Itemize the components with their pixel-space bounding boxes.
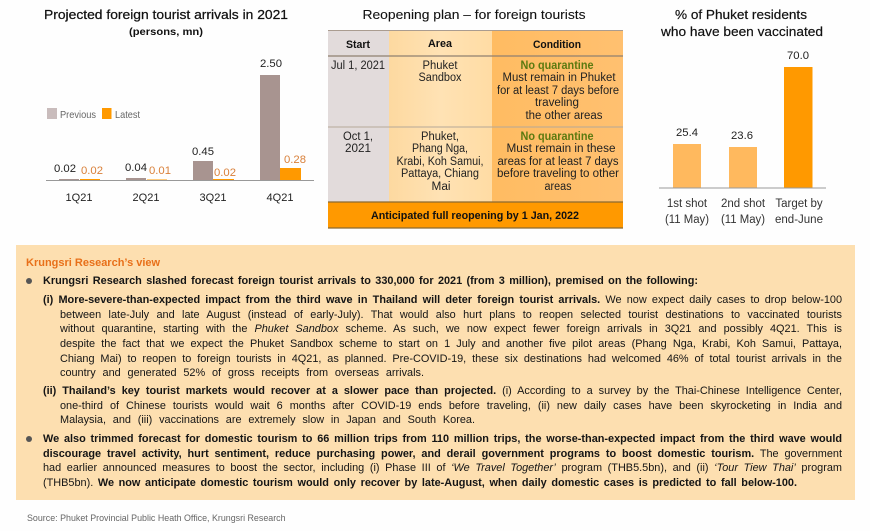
table footer: Anticipated full reopening by 1 Jan, 2022 xyxy=(371,210,579,222)
quarter labels: 4Q21 xyxy=(267,192,293,204)
value labels: 0.02 xyxy=(214,167,236,179)
row: Jul 1 2021: for at least 7 days before xyxy=(497,85,619,97)
row: Oct 1 2021: Must remain in these xyxy=(506,143,616,155)
row: Oct 1 2021: 2021 xyxy=(345,143,371,155)
row: Jul 1 2021: No quarantine xyxy=(520,60,594,72)
row: Oct 1 2021: Pattaya, Chiang xyxy=(401,168,479,180)
table title: Reopening plan – for foreign tourists xyxy=(362,7,586,22)
point (i): country and generated 52% of gross receipts from overseas arrivals. xyxy=(60,367,424,379)
category labels xyxy=(665,198,823,226)
chart title xyxy=(660,7,823,39)
row: Oct 1 2021 xyxy=(343,131,619,193)
point (ii) xyxy=(43,385,842,426)
chart title: who have been vaccinated xyxy=(660,24,823,39)
point (i): between late-July and late August (instead of early-July). That would also hurt plans to reopen selected tourist destinations to vaccinated tourists xyxy=(60,308,842,320)
row: Oct 1 2021: Mai xyxy=(432,181,450,193)
row: Oct 1 2021: Krabi, Koh Samui, xyxy=(396,156,484,168)
value labels: 0.04 xyxy=(125,162,147,174)
table header: Condition xyxy=(533,39,581,51)
bars xyxy=(59,75,301,180)
category labels: 2nd shot xyxy=(721,198,766,210)
row: Oct 1 2021: Phuket, xyxy=(421,131,459,143)
value labels: 23.6 xyxy=(731,130,753,142)
table cells xyxy=(328,30,623,228)
value labels: 0.45 xyxy=(192,146,214,158)
panel heading: Krungsri Research’s view xyxy=(26,257,160,269)
row: Oct 1 2021: before traveling to other xyxy=(497,168,619,180)
bullet 2 xyxy=(26,433,842,489)
chart title: % of Phuket residents xyxy=(675,7,808,22)
value labels: 25.4 xyxy=(676,127,698,139)
value labels: 2.50 xyxy=(260,58,282,70)
point (i): (i) More-severe-than-expected impact from the third wave in Thailand will deter foreign tourist arrivals. We now expect daily cases to drop below-100 xyxy=(43,294,842,306)
row: Jul 1 2021: Must remain in Phuket xyxy=(502,72,616,84)
category labels: (11 May) xyxy=(665,214,709,226)
point (i) xyxy=(43,294,842,379)
row: Jul 1 2021: Sandbox xyxy=(418,72,462,84)
quarter labels: 2Q21 xyxy=(133,192,159,204)
chart: Phuket residents vaccinated xyxy=(659,7,826,226)
axis xyxy=(659,187,826,189)
bullet 2: (THB5bn). We now anticipate domestic tourism would only recover by late-August, when daily domestic cases is predicted to fall below-100. xyxy=(43,477,797,489)
category labels: 1st shot xyxy=(667,198,708,210)
quarter labels xyxy=(66,192,293,204)
value labels xyxy=(54,58,306,179)
row: Jul 1 2021 xyxy=(331,60,619,122)
value labels: 0.02 xyxy=(54,163,76,175)
quarter labels: 3Q21 xyxy=(200,192,226,204)
legend: Latest xyxy=(115,109,140,121)
value labels: 0.28 xyxy=(284,154,306,166)
category labels: (11 May) xyxy=(721,214,765,226)
legend: Previous xyxy=(60,109,96,121)
row: Jul 1 2021: traveling xyxy=(535,97,579,109)
axis xyxy=(46,180,314,182)
value labels: 70.0 xyxy=(787,50,809,62)
row: Jul 1 2021: the other areas xyxy=(526,110,603,122)
row: Oct 1 2021: areas for at least 7 days xyxy=(498,156,619,168)
category labels: end-June xyxy=(775,214,823,226)
category labels: Target by xyxy=(775,198,823,210)
point (i): despite the fact that we expect the Phuket Sandbox scheme to start on 1 July and another five pilot areas (Phang Nga, Krabi, Koh Samui, Pattaya, xyxy=(60,338,842,350)
row: Oct 1 2021: areas xyxy=(544,181,572,193)
table: reopening plan xyxy=(328,7,623,229)
chart title: (persons, mn) xyxy=(129,26,203,38)
bullet 2: had earlier announced measures to boost the sector, including (i) Phase III of ‘We Travel Together’ program (THB5.5bn), and (ii) ‘Tour Tiew Thai’ program xyxy=(43,462,842,474)
bullet 2: discourage travel activity, hurt sentiment, reduce purchasing power, and derail government programs to boost domestic tourism. The government xyxy=(43,448,842,460)
chart: projected foreign tourist arrivals xyxy=(44,7,314,204)
bullet 1: Krungsri Research slashed forecast foreign tourist arrivals to 330,000 for 2021 (from 3 million), premised on the following: xyxy=(43,275,698,287)
row: Oct 1 2021: Oct 1, xyxy=(343,131,373,143)
quarter labels: 1Q21 xyxy=(66,192,92,204)
value labels: 0.01 xyxy=(149,165,171,177)
value labels: 0.02 xyxy=(81,165,103,177)
value labels xyxy=(676,50,809,142)
table header: Area xyxy=(428,38,453,50)
point (i): without quarantine, starting with the Phuket Sandbox scheme. As such, we now expect fewer foreign arrivals in 3Q21 and possibly 4Q21. This is xyxy=(60,323,842,335)
table header: Start xyxy=(346,39,370,51)
bars xyxy=(673,67,812,188)
chart title xyxy=(44,7,288,38)
bullet 2: We also trimmed forecast for domestic tourism to 66 million trips from 110 million trips, the worse-than-expected impact from the third wave would xyxy=(43,433,842,445)
panel: Krungsri Research's view xyxy=(16,245,855,500)
legend xyxy=(47,108,140,121)
row: Oct 1 2021: No quarantine xyxy=(520,131,594,143)
point (i): Chiang Mai) to reopen to foreign tourists in 4Q21, as planned. Pre-COVID-19, these six destinations had welcomed 46% of total tourist arrivals in the xyxy=(60,352,842,364)
chart title: Projected foreign tourist arrivals in 2021 xyxy=(44,7,288,22)
point (ii): one-third of Chinese tourists would wait 6 months after COVID-19 ends before traveling, (ii) new daily cases have been skyrocketing in India and xyxy=(60,400,842,412)
table header xyxy=(346,38,581,51)
source note: Source: Phuket Provincial Public Heath Office, Krungsri Research xyxy=(27,513,286,524)
point (ii): Malaysia, and (iii) vaccinations are extremely slow in Japan and South Korea. xyxy=(60,414,475,426)
row: Jul 1 2021: Jul 1, 2021 xyxy=(331,60,385,72)
row: Jul 1 2021: Phuket xyxy=(422,60,458,72)
point (ii): (ii) Thailand’s key tourist markets would recover at a slower pace than projected. (i) According to a survey by the Thai-Chinese Intelligence Center, xyxy=(43,385,842,397)
row: Oct 1 2021: Phang Nga, xyxy=(412,143,468,155)
